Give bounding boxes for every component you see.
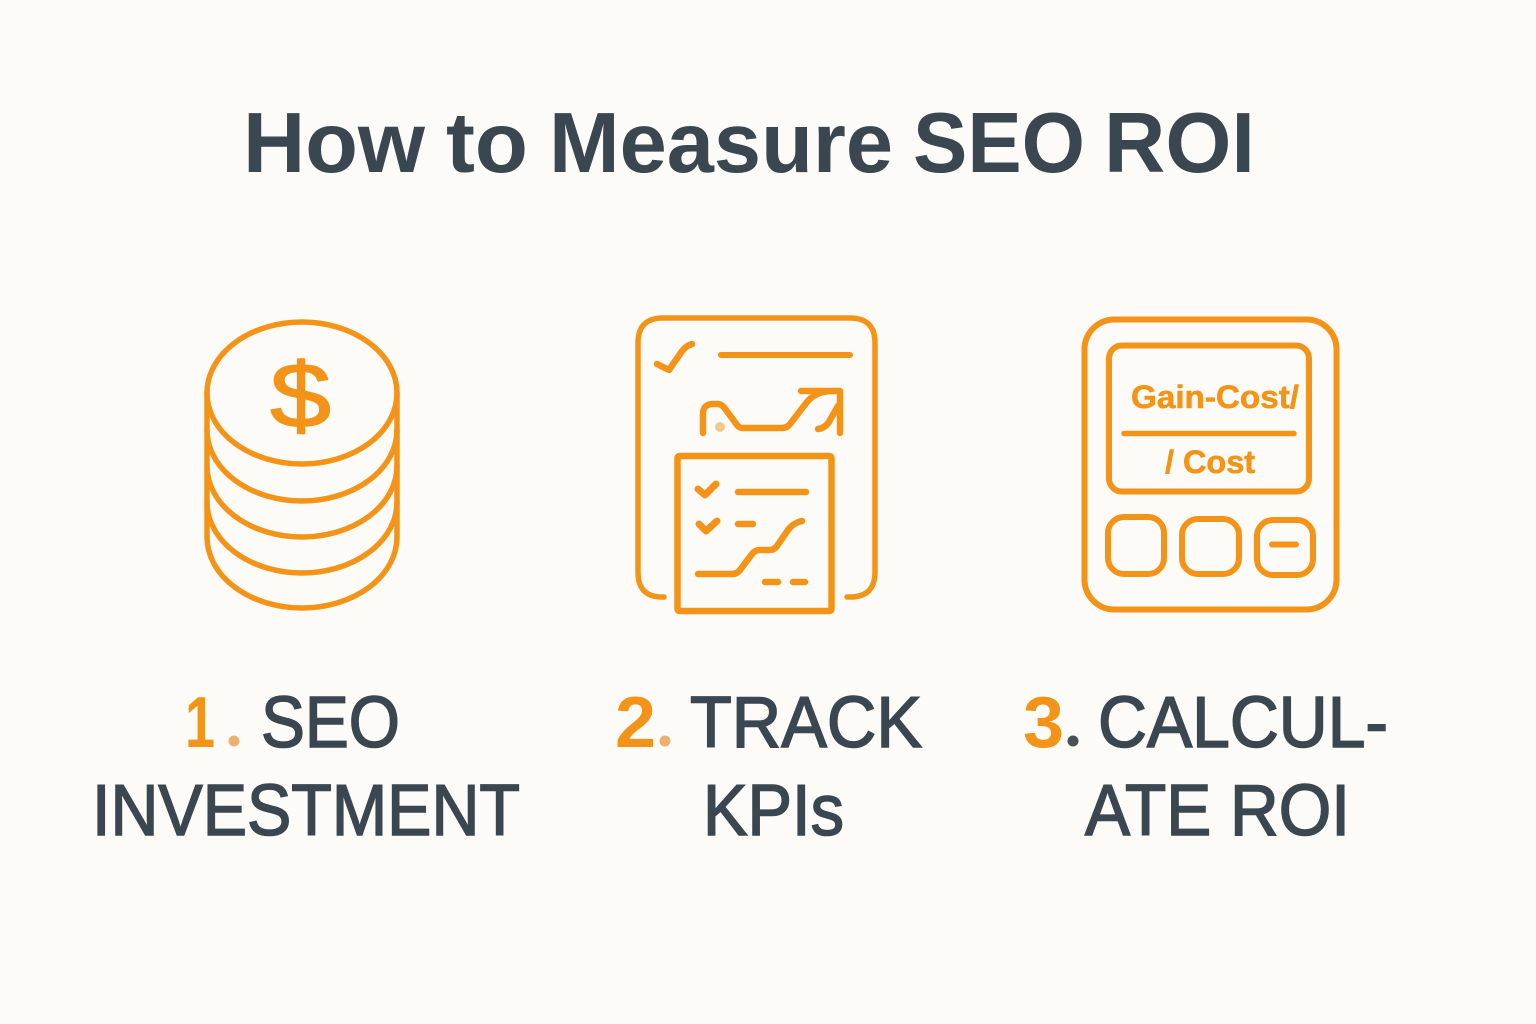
step 3 label: ATE ROI — [1085, 771, 1350, 851]
checklist check two — [699, 521, 717, 531]
title: Measure — [549, 96, 893, 191]
step 1 label: 1 — [185, 683, 215, 763]
checklist check one — [698, 484, 716, 495]
calculator screen — [1109, 346, 1309, 492]
top check mark — [657, 344, 692, 370]
button two — [1182, 519, 1239, 574]
step 2 label — [615, 683, 922, 851]
step 2 label: TRACK — [690, 683, 922, 763]
fraction bar — [1124, 431, 1294, 436]
step 2 label: 2 — [615, 683, 656, 763]
step 1 label — [92, 683, 520, 851]
title: to — [446, 96, 528, 191]
inner checklist card — [678, 456, 832, 611]
step 3 label: 3 — [1023, 683, 1064, 763]
step 1 label: SEO — [261, 683, 400, 763]
button three — [1257, 520, 1313, 575]
step 1 label: INVESTMENT — [92, 771, 520, 851]
icon: KPI report — [638, 318, 875, 611]
icon: coin stack — [207, 322, 397, 608]
step 2 label: KPIs — [703, 771, 844, 851]
dashes — [765, 579, 805, 585]
formula denominator: / Cost — [1165, 444, 1255, 480]
title: SEO — [913, 96, 1085, 191]
small trend line — [698, 521, 802, 574]
title — [243, 96, 1255, 191]
button one — [1108, 517, 1164, 574]
speck — [715, 422, 725, 432]
line chart with arrow — [703, 391, 840, 433]
title: How — [243, 96, 426, 191]
title: ROI — [1104, 96, 1255, 191]
icon: ROI calculator — [1084, 320, 1336, 610]
minus sign — [1272, 542, 1296, 548]
step 3 label — [1023, 683, 1388, 851]
formula numerator: Gain-Cost/ — [1131, 379, 1299, 415]
step 3 label: CALCUL- — [1098, 683, 1388, 763]
dollar sign: $ — [270, 345, 331, 447]
